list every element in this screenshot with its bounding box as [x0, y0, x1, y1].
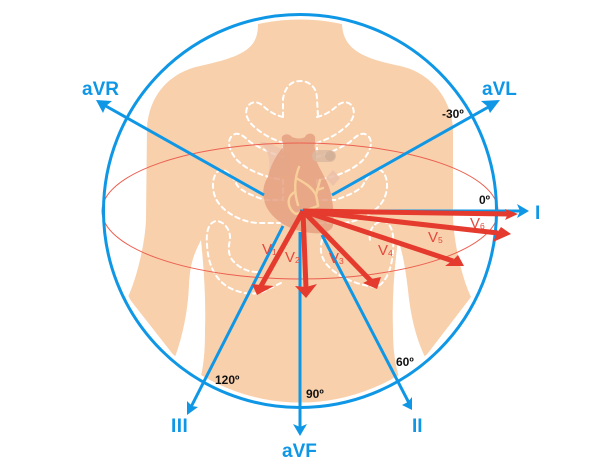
precordial lead labels: 4 — [388, 248, 393, 258]
precordial lead labels: V — [428, 229, 438, 246]
arrow: V6 — [303, 209, 518, 220]
lead labels: limb leads: aVR — [82, 79, 119, 100]
horizontal plane ellipse — [102, 143, 498, 279]
arrow: aVF axis — [293, 232, 307, 436]
lungs dashed outline — [207, 81, 393, 294]
precordial lead labels: V — [470, 215, 480, 232]
precordial lead labels: V — [262, 241, 272, 258]
frontal plane circle — [104, 14, 496, 408]
angle labels: -30º — [442, 107, 464, 121]
lead labels: limb leads: aVF — [282, 441, 317, 462]
arrow: aVL axis — [332, 100, 500, 195]
precordial lead labels: V — [378, 242, 388, 259]
precordial lead labels — [262, 215, 485, 267]
precordial lead labels: 5 — [438, 235, 443, 245]
precordial lead labels: 1 — [272, 247, 277, 257]
precordial lead labels: 6 — [480, 221, 485, 231]
lead labels: limb leads: III — [171, 416, 188, 437]
angle labels: 90º — [306, 387, 324, 401]
arrow: V5 — [303, 211, 511, 242]
arrow: V1 — [252, 211, 303, 295]
angle labels: 60º — [396, 355, 414, 369]
lead labels: limb leads: II — [412, 416, 423, 437]
arrow: V3 — [303, 211, 381, 289]
precordial lead labels: 2 — [295, 255, 300, 265]
angle labels — [215, 107, 491, 401]
lead labels: limb leads: aVL — [482, 79, 517, 100]
arrow: lead I axis — [300, 204, 529, 218]
lead labels: limb leads — [82, 79, 540, 462]
angle labels: 0º — [479, 193, 491, 207]
arrow: V4 — [303, 211, 464, 266]
arrow: lead III axis — [187, 226, 283, 415]
heart — [260, 134, 340, 233]
precordial lead labels: V — [329, 250, 339, 267]
precordial lead labels: 3 — [339, 256, 344, 266]
arrow: lead II axis — [322, 235, 412, 410]
arrow: V2 — [295, 211, 317, 298]
body silhouette — [128, 0, 471, 420]
angle labels: 120º — [215, 373, 240, 387]
arrow: aVR axis — [96, 100, 264, 195]
lead labels: limb leads: I — [535, 203, 540, 224]
precordial lead labels: V — [285, 249, 295, 266]
